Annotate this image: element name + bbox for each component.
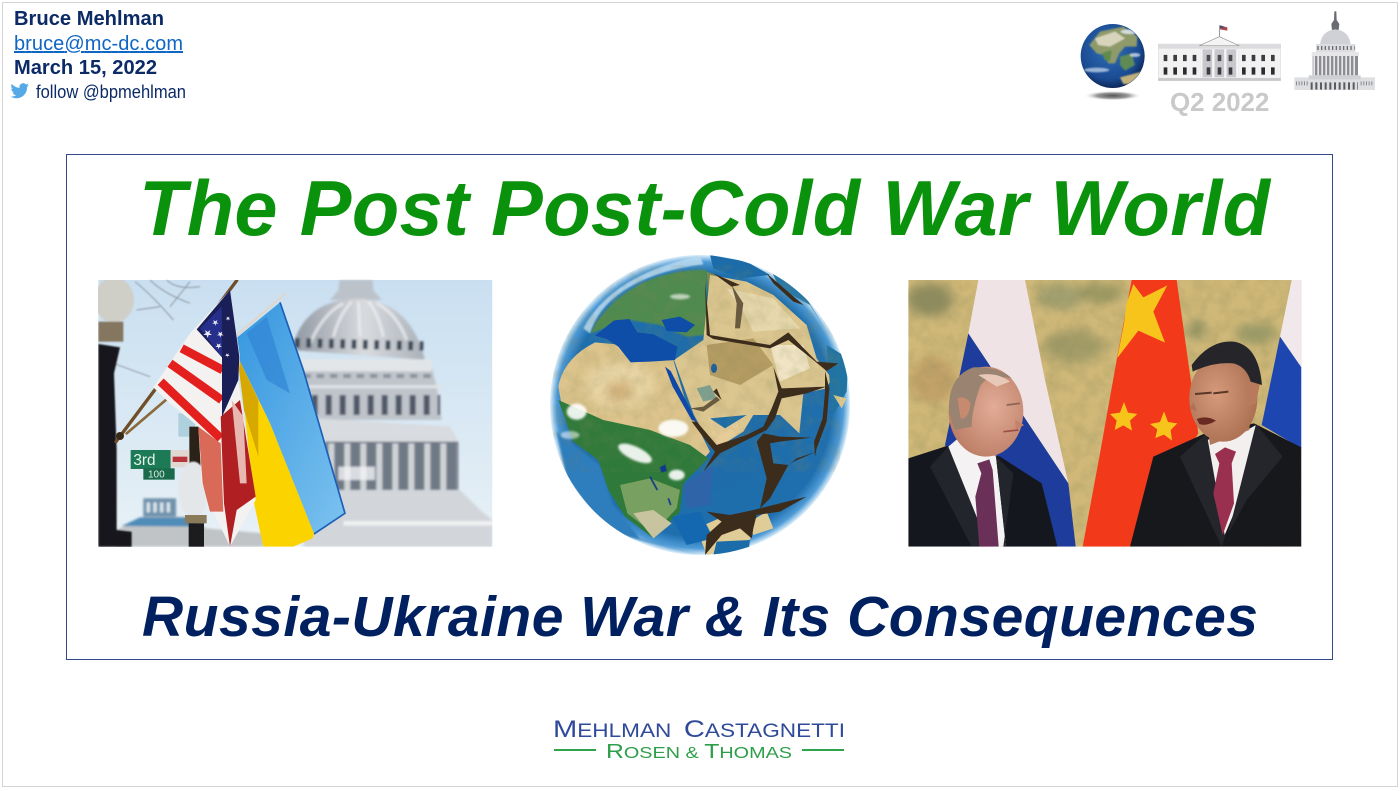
tree branches bbox=[113, 280, 200, 377]
wallpaper background bbox=[907, 280, 1301, 547]
ocean sphere bbox=[550, 255, 850, 555]
flag poles bbox=[116, 281, 285, 442]
date: March 15, 2022 bbox=[14, 56, 157, 79]
logo left rule bbox=[554, 749, 596, 751]
street lamp bbox=[94, 277, 134, 547]
logo: Mehlman Castagnetti Rosen & Thomas bbox=[553, 716, 845, 763]
logo right rule bbox=[802, 749, 844, 751]
photo: US and Ukraine flags with Capitol bbox=[94, 277, 492, 547]
land texture bbox=[553, 265, 840, 472]
chinese flag bbox=[1083, 280, 1198, 547]
right russian flag bbox=[1262, 280, 1301, 448]
street signs: 3rd bbox=[133, 452, 155, 469]
icon: twitter bird bbox=[10, 83, 29, 98]
street signs: 100 bbox=[148, 469, 165, 480]
email link: bruce@mc-dc.com bbox=[14, 33, 183, 55]
lakes bbox=[650, 466, 671, 505]
quarter label: Q2 2022 bbox=[1170, 87, 1269, 117]
globe: cracked earth bbox=[550, 255, 850, 555]
Xi bbox=[1130, 342, 1301, 547]
lower-left deep ocean bbox=[557, 432, 700, 555]
north africa sahara bbox=[558, 342, 710, 456]
europe bbox=[590, 270, 707, 337]
logo second line: ROSEN & THOMAS bbox=[606, 741, 792, 763]
main panel frame bbox=[66, 154, 1332, 660]
twitter handle: follow @bpmehlman bbox=[36, 82, 186, 102]
subtitle: Russia-Ukraine War & Its Consequences bbox=[142, 585, 1258, 649]
logo first line: MEHLMAN CASTAGNETTI bbox=[553, 716, 845, 743]
icon: earth bbox=[1081, 24, 1145, 101]
madagascar ocean and blue south bbox=[683, 465, 713, 508]
mediterranean and seas bbox=[595, 319, 677, 362]
author block bbox=[10, 7, 186, 102]
american flag bbox=[153, 290, 256, 547]
asia and arabia land bbox=[674, 275, 832, 448]
author name: Bruce Mehlman bbox=[14, 7, 164, 30]
street signs bbox=[131, 413, 208, 547]
clouds bbox=[561, 294, 690, 480]
photo: Putin and Xi with flags bbox=[907, 280, 1301, 547]
central africa forest bbox=[558, 400, 708, 538]
left russian flag bbox=[945, 280, 1076, 547]
ukraine flag bbox=[236, 302, 345, 547]
main title: The Post Post-Cold War World bbox=[139, 166, 1272, 252]
icon: capitol bbox=[1294, 11, 1375, 90]
cracks bbox=[690, 273, 838, 555]
top right icons bbox=[1081, 11, 1375, 117]
icon: white house bbox=[1158, 25, 1281, 81]
Putin bbox=[908, 367, 1057, 547]
capitol dome background bbox=[117, 280, 492, 547]
